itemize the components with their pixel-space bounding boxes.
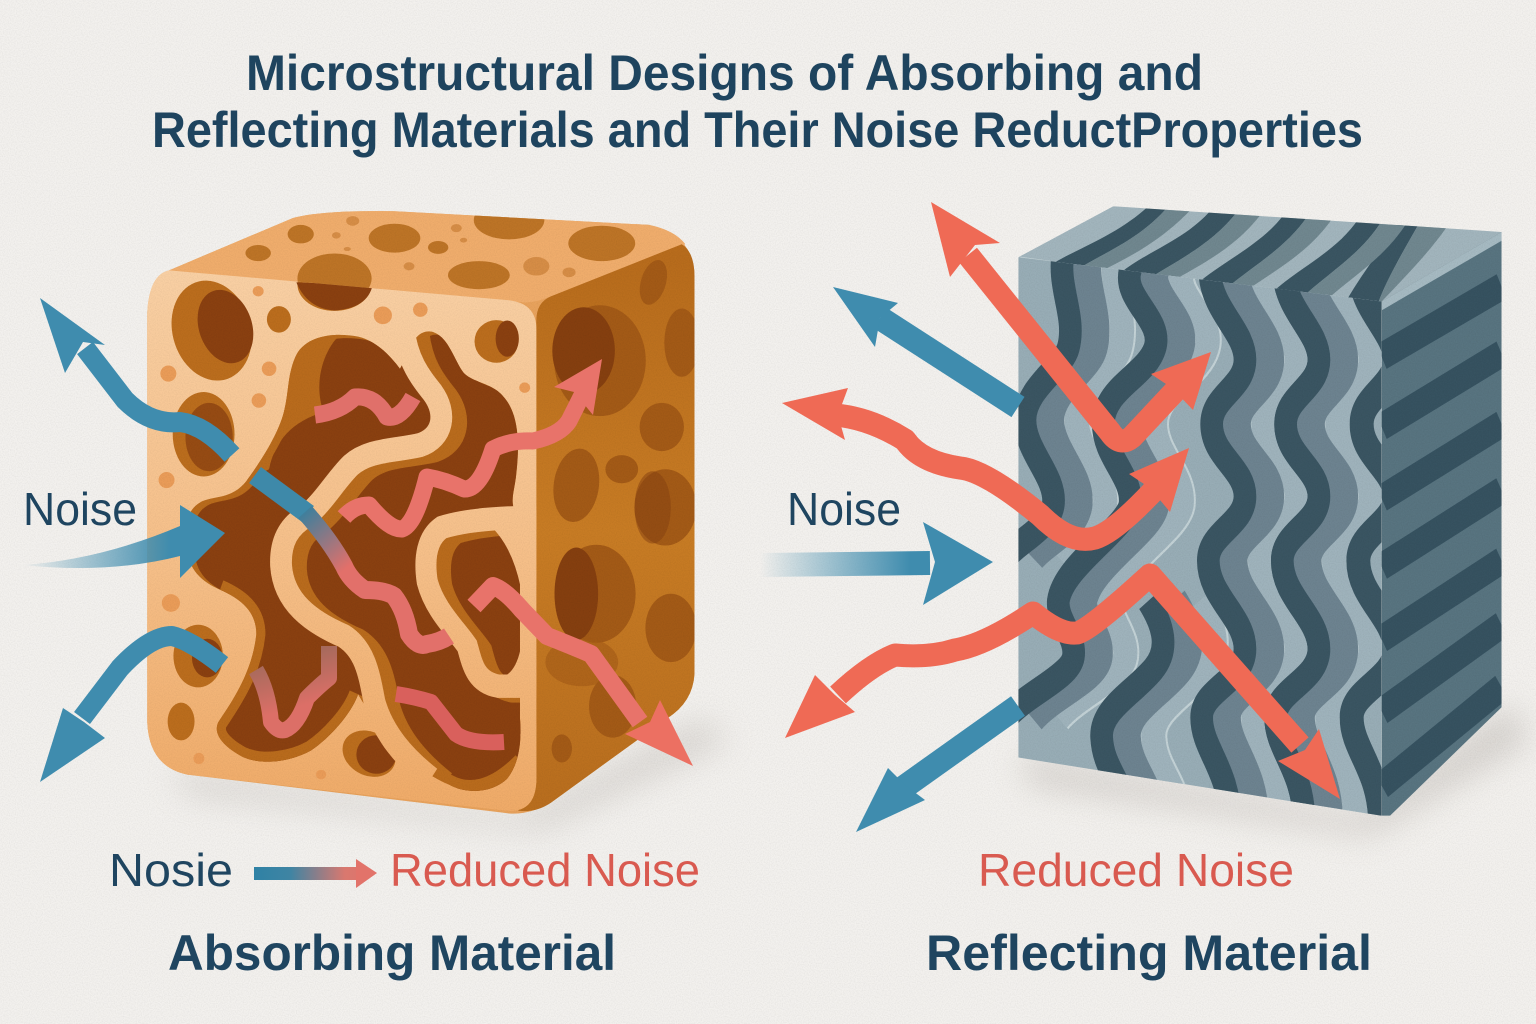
title: Reflecting Materials and Their Noise ReductProperties [152, 102, 1363, 158]
arrow: blue fading to pink through cavity [305, 512, 449, 645]
block silhouette [147, 211, 694, 814]
arrow: lower pink wave [396, 694, 504, 742]
caption: reflecting material: Reflecting Material [926, 925, 1372, 981]
arrow: blue internal segment [255, 475, 308, 514]
front face [147, 270, 536, 811]
top face with layered stripes [1018, 206, 1501, 302]
pores on front face [157, 258, 530, 785]
label: reduced noise right: Reduced Noise [978, 844, 1294, 896]
arrows on reflecting material [760, 202, 1340, 832]
arrow: pink exiting up-right [344, 359, 602, 529]
arrow: blue deflected down-left [40, 636, 222, 782]
arrow: noise entering, blue [760, 522, 993, 605]
label: noise right: Noise [787, 483, 901, 535]
arrow: upper pink wave [315, 397, 413, 417]
title: Microstructural Designs of Absorbing and [246, 45, 1203, 101]
shadow under reflecting block [1020, 705, 1530, 835]
right face [518, 244, 699, 811]
arrows on absorbing material [22, 298, 693, 782]
arrow: red lower bouncing [785, 575, 1340, 799]
cream channels [281, 329, 538, 779]
arrow: blue lower reflected [856, 706, 1018, 832]
arrow: red middle bouncing [782, 388, 1189, 539]
absorbing material block [140, 200, 710, 814]
label: reduced noise left: Reduced Noise [390, 844, 700, 896]
label: noise left: Noise [23, 483, 137, 535]
caption: absorbing material: Absorbing Material [168, 925, 616, 981]
reflecting material block [1000, 195, 1520, 822]
legend arrow [254, 859, 377, 888]
title [152, 45, 1363, 158]
front face with wavy layers [1007, 247, 1395, 822]
shadow under absorbing block [170, 720, 730, 830]
right face with stripes [1382, 227, 1505, 822]
legend: absorbing noise reduction [109, 844, 700, 896]
arrow: left-lower pink wave [256, 646, 329, 730]
arrow: blue upper reflected [833, 287, 1018, 407]
top face [170, 211, 686, 302]
arrow: pink exiting down-right [474, 586, 693, 766]
arrow: red top bouncing [931, 202, 1211, 441]
arrow: noise entering, blue [22, 505, 225, 578]
central winding cavity [190, 331, 536, 791]
label: nosie: Nosie [109, 844, 233, 896]
arrow: blue deflected up-left [40, 298, 232, 455]
